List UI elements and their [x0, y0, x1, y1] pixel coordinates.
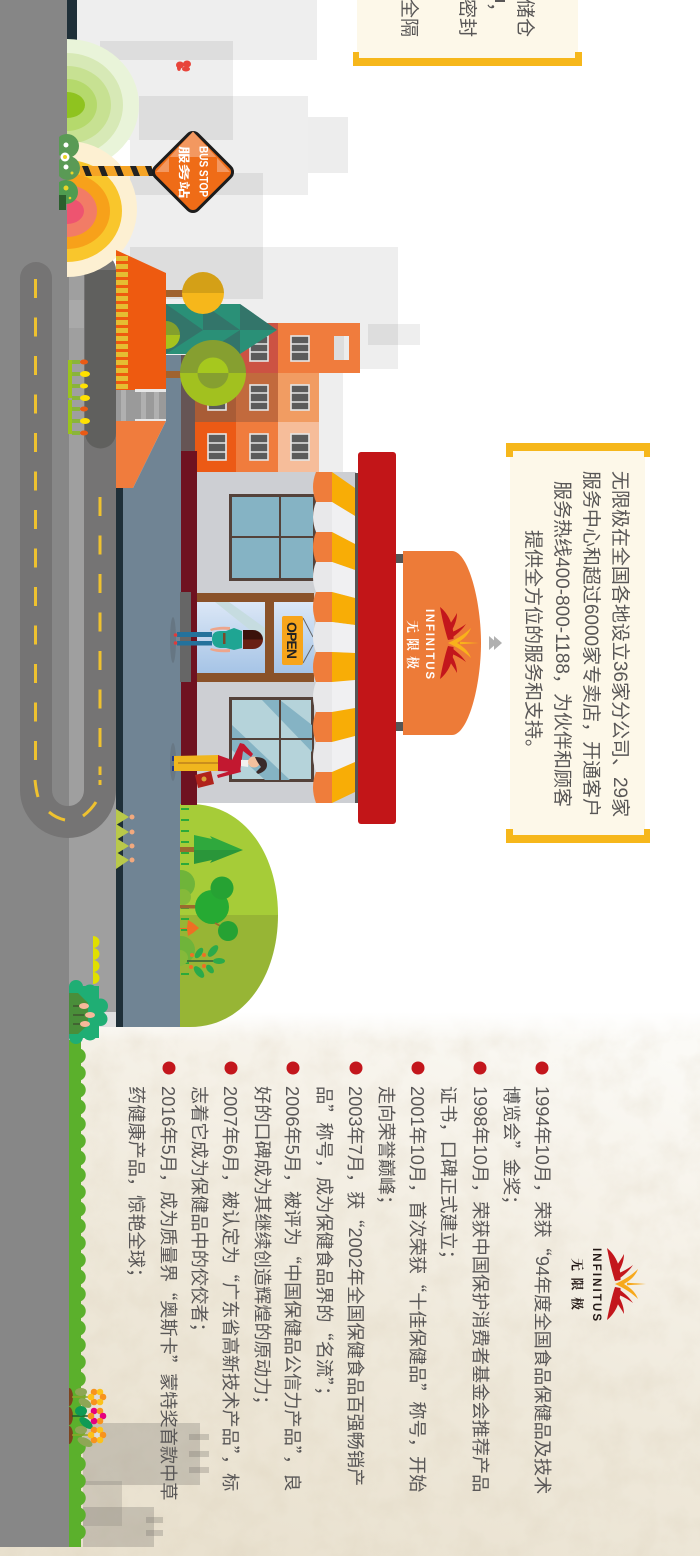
open sign: [282, 616, 313, 665]
teal pine tree: [166, 304, 277, 354]
list text: 博览会 ” 金奖；: [499, 1086, 525, 1213]
bush at bus stop: [59, 134, 80, 210]
bus stop pole: [80, 166, 153, 176]
arrow: [489, 636, 502, 650]
logo brand text: INFINITUS: [590, 1248, 602, 1321]
teal flowering bush: [69, 980, 108, 1044]
small triangle shrubs: [116, 809, 134, 869]
shop window right: [230, 698, 313, 781]
yellow round tree: [166, 272, 224, 314]
pine tree in park: [180, 835, 243, 864]
panel: achievements list: [126, 1062, 556, 1500]
pedestrian: woman in teal: [170, 617, 263, 663]
logo on sign: [440, 607, 479, 679]
list text: 走向荣誉巅峰；: [376, 1086, 396, 1213]
list text: 品 ” 称号，成为保健食品界的 “ 名流 ” ；: [312, 1086, 338, 1404]
green concentric semicircle tree: [67, 39, 139, 156]
list text: 2016年5月，成为质量界 “ 奥斯卡 ” 蒙特奖首款中草: [156, 1086, 182, 1500]
open sign: OPEN: [284, 622, 300, 659]
berry plant: [180, 936, 225, 978]
yellow hedge: [93, 936, 100, 984]
list text: 2007年6月，被认定为 “ 广东省高新技术产品 ” ，标: [218, 1086, 244, 1491]
list text: 2003年7月，获 “ 2002年全国保健食品百强畅销产: [343, 1086, 369, 1486]
bus stop sign text: BUS STOP: [196, 146, 210, 197]
apartment windows: [208, 336, 309, 460]
list text: 1994年10月，荣获 “ 94年度全国食品保健品及技术: [530, 1086, 556, 1494]
top panel text: ，: [485, 2, 506, 21]
bus stop sign: [151, 130, 235, 214]
service text: [522, 471, 631, 817]
flower middle: [88, 1408, 106, 1424]
flower bottom: [88, 1427, 106, 1443]
service text: 无限极在全国各地设立36家分公司、29家: [609, 471, 631, 817]
top panel text: [398, 0, 536, 37]
logo: Infinitus star: [607, 1248, 646, 1320]
shop wall: [180, 451, 356, 803]
faded factories: [83, 1423, 209, 1547]
icon: red butterfly: [176, 60, 191, 72]
sign brand text: INFINITUS: [423, 609, 435, 679]
flowers on grass: [69, 1388, 106, 1449]
service text: 服务热线400-800-1188，为伙伴和顾客: [551, 481, 573, 807]
orange apartment block: [181, 323, 360, 472]
orange concentric semicircle tree: [67, 142, 137, 277]
service text: 提供全方位的服务和支持。: [522, 530, 544, 758]
service text: 服务中心和超过6000家专卖店，开通客户: [580, 471, 602, 817]
panel: top partial: [353, 0, 582, 66]
list text: 证书，口碑正式建立；: [438, 1086, 458, 1268]
flower top: [88, 1389, 106, 1405]
list text: 2001年10月，首次荣获 “ 十佳保健品 ” 称号，开始: [405, 1086, 431, 1492]
list text: 2006年5月，被评为 “ 中国保健品公信力产品 ” ，良: [280, 1086, 306, 1491]
pedestrian: woman in red: [170, 743, 267, 788]
pavement: [116, 355, 181, 1027]
road surface: [0, 0, 116, 1547]
green hill park: [180, 803, 278, 1027]
shop door: [197, 593, 314, 682]
bullets: [162, 1062, 548, 1074]
orange flower: [180, 920, 199, 936]
shop window left: [230, 495, 315, 580]
small cafe building: [116, 250, 175, 488]
bus stop sign chinese text: 服务站: [177, 146, 191, 199]
list text: 药健康产品，惊艳全球；: [126, 1086, 146, 1286]
skyline: pale grey buildings: [77, 0, 420, 472]
list text: 1998年10月，荣获中国保护消费者基金会推荐产品: [470, 1086, 490, 1492]
green round tree: [166, 340, 246, 406]
top panel text: 密封: [456, 0, 478, 37]
list text: 好的口碑成为其继续创造辉煌的原动力；: [252, 1086, 272, 1413]
background: parchment: [0, 1012, 700, 1556]
panel: service network: [506, 443, 650, 843]
list text: [126, 1086, 556, 1500]
sign chinese brand: 无限极: [405, 620, 420, 674]
list text: 志着它成为保健品中的佼佼者；: [189, 1086, 209, 1341]
logo chinese brand: 无限极: [570, 1258, 584, 1317]
round trees in park: [180, 870, 238, 941]
road centre dashes: [35, 279, 100, 820]
top panel text: 储仓: [514, 0, 536, 37]
hanging store sign: [396, 551, 481, 735]
awning: [313, 472, 359, 803]
grass strip: [69, 1040, 81, 1547]
flower bed by road: [68, 360, 90, 436]
top panel text: 全隔: [398, 0, 420, 37]
red shop roof board: [358, 452, 396, 824]
